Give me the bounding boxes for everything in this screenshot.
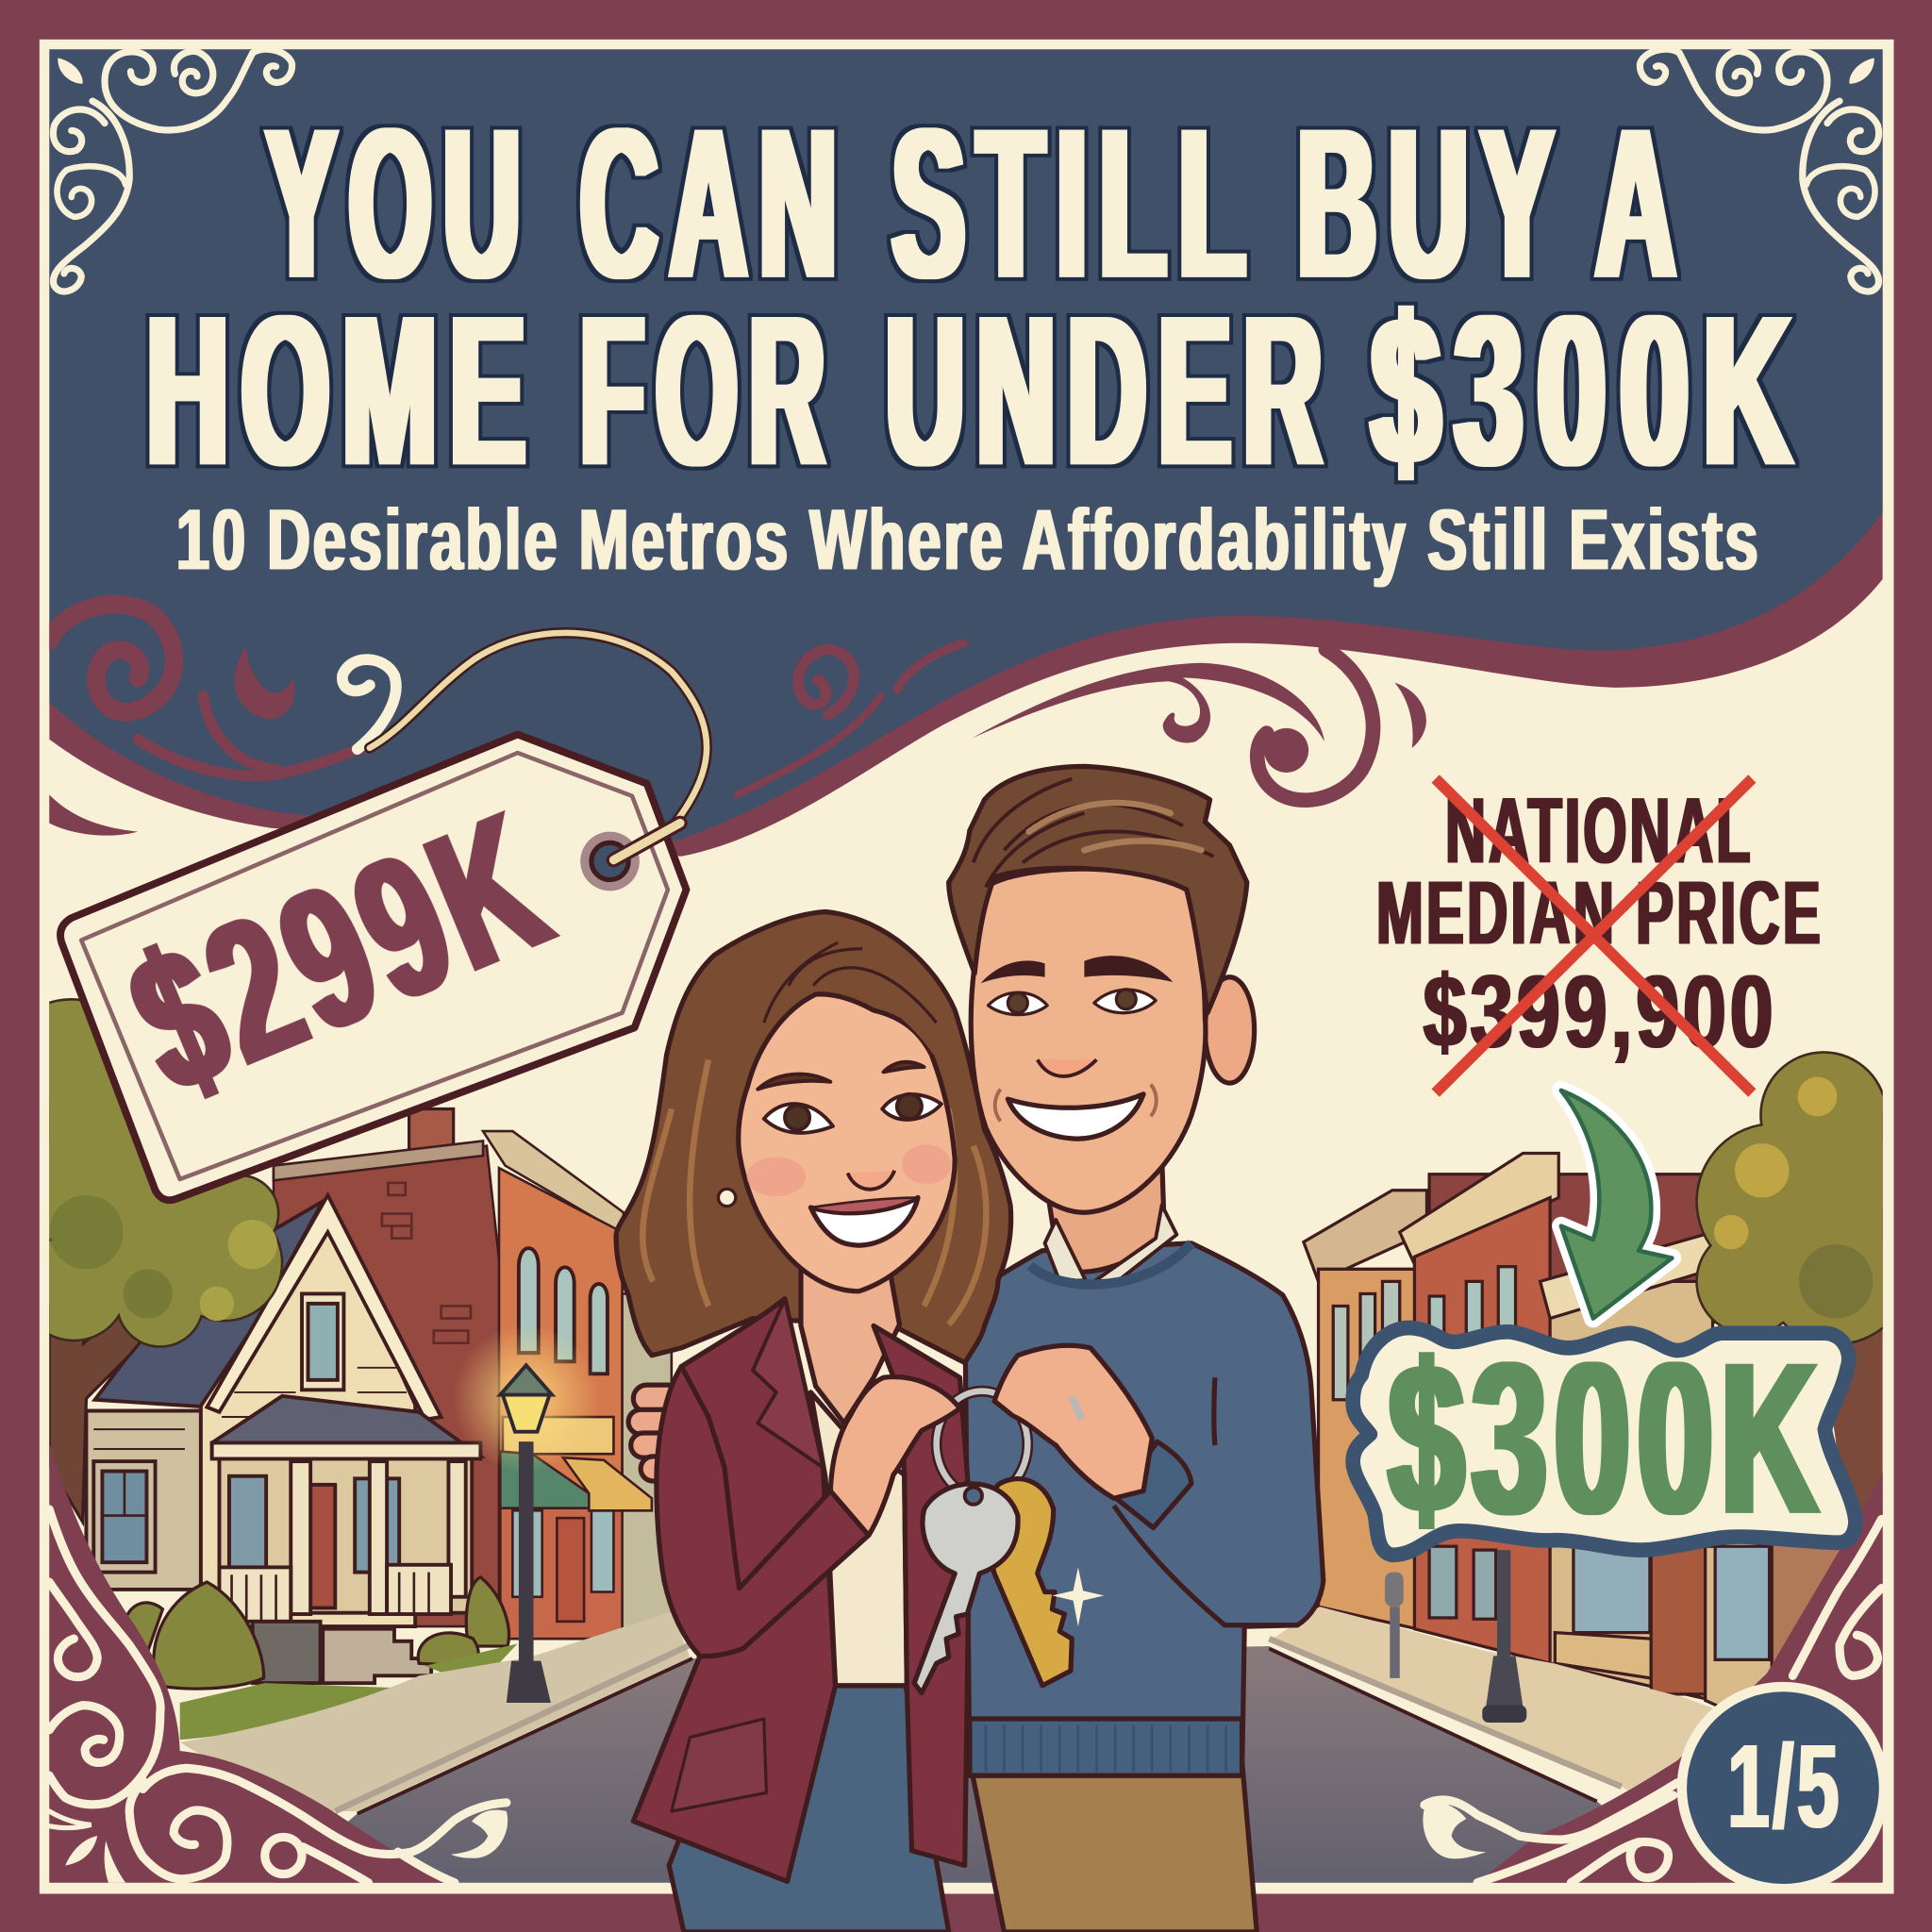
small burgundy wedge left <box>49 794 138 836</box>
brick building left <box>274 1109 672 1639</box>
title: BUY <box>1297 84 1566 324</box>
sweater <box>965 1243 1324 1775</box>
title: HOME <box>146 271 539 510</box>
house <box>86 1195 480 1683</box>
jacket lapel <box>753 1299 823 1468</box>
hair highlights <box>642 1059 986 1324</box>
top left corner ornament <box>53 49 292 291</box>
bottom left corner ornament <box>49 1442 508 1883</box>
key hole <box>965 1487 982 1505</box>
jacket right panel <box>874 1325 970 1865</box>
hair highlights <box>1029 803 1201 850</box>
burgundy swirl left <box>49 605 963 794</box>
arched windows <box>519 1248 608 1374</box>
earring <box>718 1189 736 1207</box>
hair back <box>616 912 1011 1363</box>
nose <box>1038 1059 1096 1076</box>
lawn <box>180 1683 400 1740</box>
man's hand <box>994 1345 1152 1498</box>
face <box>971 869 1206 1212</box>
mouth <box>810 1198 918 1245</box>
title <box>146 84 1807 510</box>
sweater cuff <box>1111 1441 1191 1528</box>
road <box>271 1646 1700 1885</box>
median price text <box>1376 778 1824 1070</box>
wedding ring <box>1072 1397 1082 1420</box>
price tag <box>60 734 687 1200</box>
price tag string <box>370 633 707 823</box>
street scene background <box>0 998 1924 1885</box>
title: STILL <box>892 84 1258 324</box>
jacket pocket <box>672 1719 766 1811</box>
crescent ornament <box>235 645 294 720</box>
left sidewalk <box>180 1611 690 1811</box>
tag eyelet <box>580 832 640 891</box>
burgundy scrolls on cream <box>973 649 1426 800</box>
street lamp right and parking meter <box>1385 1550 1526 1723</box>
right sidewalk <box>1274 1607 1713 1790</box>
title: CAN <box>580 84 849 324</box>
face <box>739 994 955 1291</box>
nose <box>848 1171 894 1190</box>
sleeve <box>1114 1377 1297 1625</box>
cream scroll <box>342 659 396 749</box>
mouth <box>1008 1094 1143 1139</box>
neck <box>801 1269 899 1424</box>
page number badge <box>1682 1687 1884 1889</box>
blush <box>747 1157 806 1196</box>
gold key <box>989 1479 1072 1686</box>
collar <box>1045 1205 1176 1281</box>
median price text: $399,900 <box>1424 955 1776 1070</box>
hands holding keys <box>830 1345 1152 1693</box>
top right corner ornament <box>1640 49 1879 291</box>
red cross <box>1436 778 1752 1093</box>
silver key <box>914 1484 1018 1693</box>
jeans <box>669 1686 949 1932</box>
jacket body <box>633 1299 836 1881</box>
trousers <box>970 1760 1257 1932</box>
blouse <box>810 1392 907 1686</box>
burgundy wave band <box>49 49 1883 857</box>
right corner scroll tip <box>1423 1801 1486 1858</box>
green down arrow <box>1561 1091 1672 1319</box>
sparkle <box>1052 1567 1104 1626</box>
woman <box>616 912 1011 1932</box>
$300K sticker <box>1353 1317 1856 1559</box>
street lamp left <box>452 1324 600 1703</box>
bushes <box>124 1577 508 1689</box>
man's hand on her shoulder <box>628 1385 688 1481</box>
hair strands <box>974 778 1214 887</box>
crossed out national median price <box>1376 778 1824 1093</box>
eyes <box>764 1094 941 1133</box>
brows <box>981 956 1173 983</box>
right buildings <box>1304 1154 1858 1731</box>
jacket sleeve <box>657 1366 869 1657</box>
hair parting strands <box>764 942 937 1023</box>
left tree <box>49 998 283 1526</box>
sticker bubble <box>1353 1328 1856 1555</box>
navy banner <box>49 49 1883 841</box>
left corner leaves and scroll tip <box>65 1810 508 1883</box>
title: A <box>1595 84 1675 324</box>
man <box>949 766 1324 1932</box>
right tree <box>1695 1051 1883 1528</box>
neck <box>1046 1158 1164 1272</box>
sweater hem <box>970 1719 1242 1775</box>
woman's hand <box>830 1377 959 1535</box>
fringe <box>740 941 959 1109</box>
bottom right corner ornament <box>1423 1473 1883 1883</box>
header banner with wave <box>49 49 1883 857</box>
brows <box>758 1062 924 1090</box>
eyes <box>989 990 1156 1015</box>
title: UNDER <box>886 271 1335 510</box>
page number badge: 1/5 <box>1727 1719 1842 1853</box>
smile creases <box>995 1084 1157 1122</box>
hair <box>949 766 1247 1013</box>
tag price: $299K <box>103 767 581 1136</box>
title: YOU <box>266 84 532 324</box>
title: FOR <box>580 271 837 510</box>
ear <box>1205 977 1255 1083</box>
awnings <box>500 1452 589 1508</box>
key ring <box>937 1391 1027 1497</box>
